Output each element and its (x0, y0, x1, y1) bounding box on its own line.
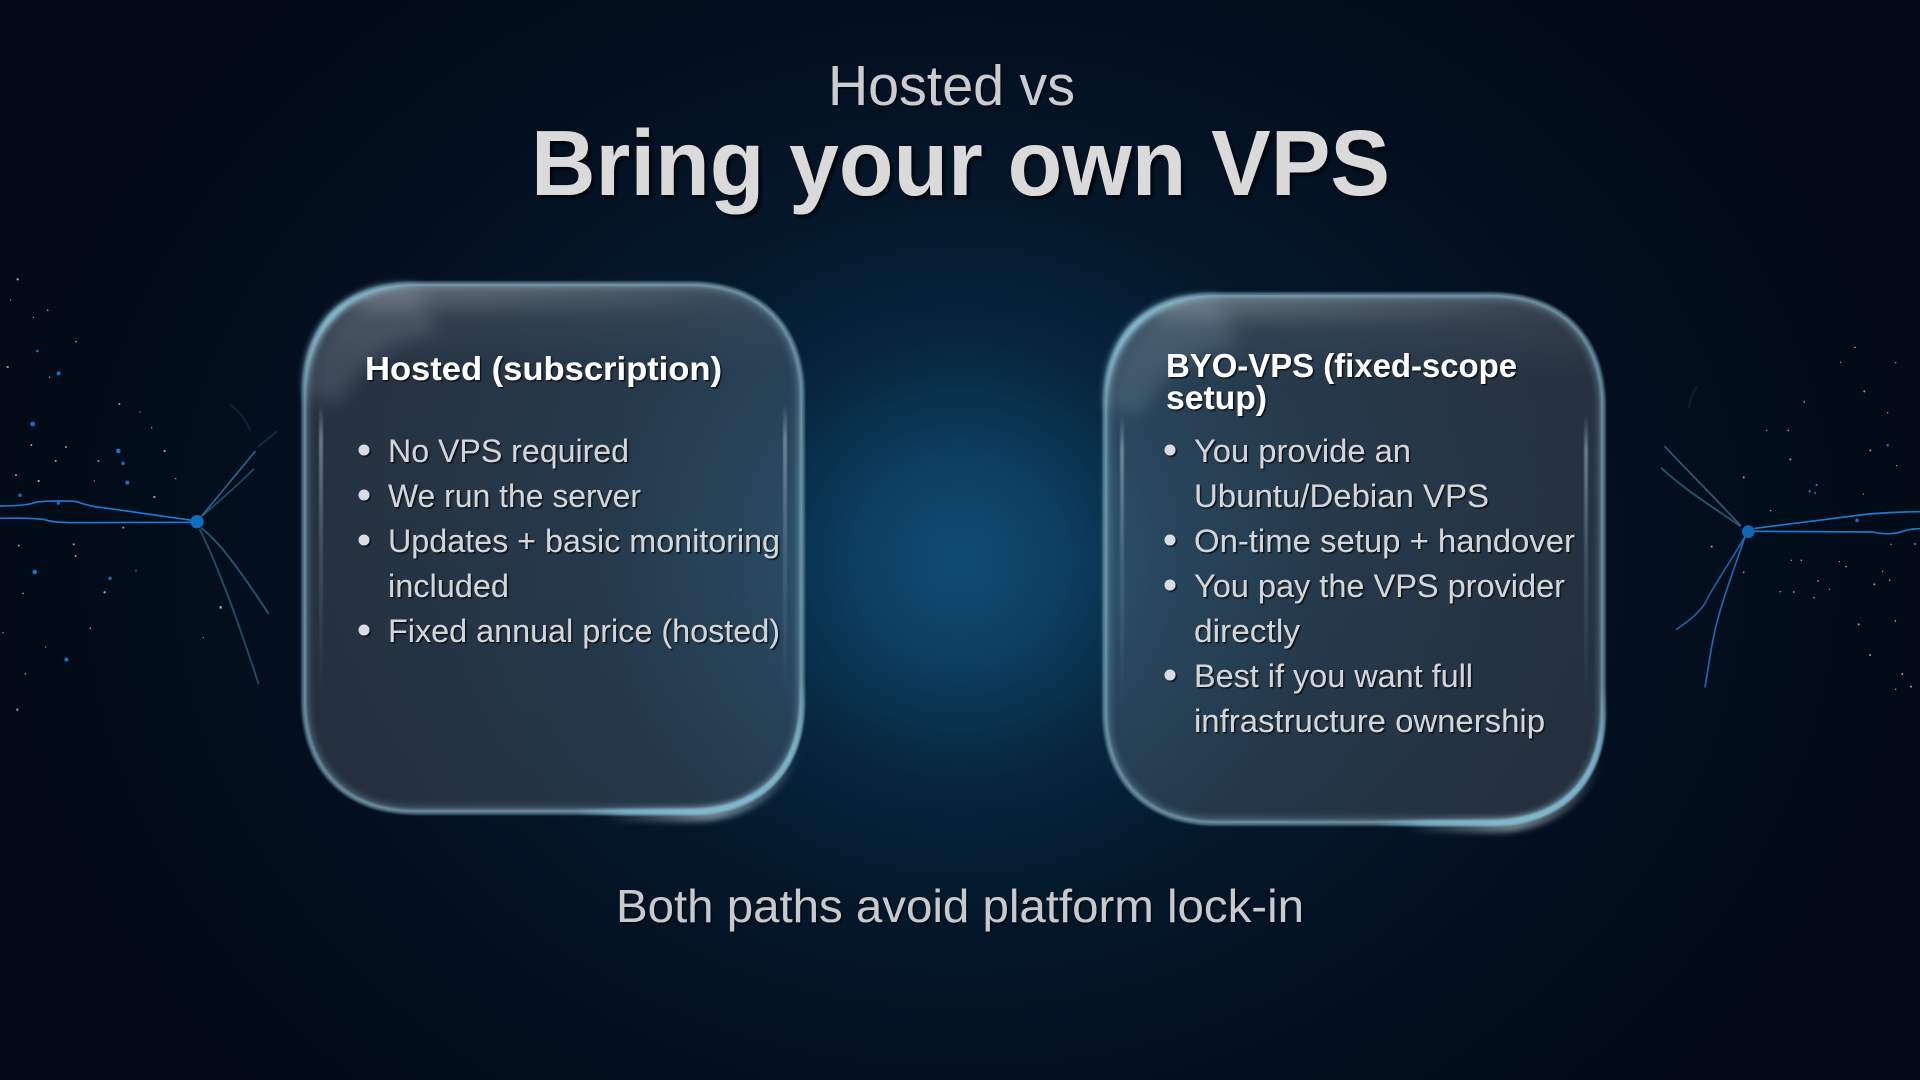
list item 4: Best if you want full (1194, 658, 1473, 694)
bullet icons (358, 444, 370, 636)
panel: hosted subscription (304, 280, 802, 815)
card heading: BYO-VPS (fixed-scope (1166, 347, 1517, 384)
left star field (2, 278, 222, 711)
list item 1: Ubuntu/Debian VPS (1194, 478, 1489, 514)
title line 2: Bring your own VPS (531, 111, 1390, 215)
list item 4: Fixed annual price (hosted) (388, 613, 780, 649)
left network lines (0, 405, 277, 683)
list item 2: On-time setup + handover (1194, 523, 1575, 559)
right network lines (1662, 387, 1920, 687)
card heading: Hosted (subscription) (365, 350, 722, 387)
bullet list (1164, 433, 1575, 739)
list item 3: included (388, 568, 509, 604)
list item 3 (388, 523, 780, 604)
heading (531, 54, 1390, 215)
card heading (1166, 347, 1517, 416)
card body (304, 280, 802, 815)
left node (190, 515, 204, 528)
list item 4 (1194, 658, 1545, 739)
list item 3: You pay the VPS provider (1194, 568, 1565, 604)
list item 1 (1194, 433, 1489, 514)
bullet list (358, 433, 780, 649)
list item 4: infrastructure ownership (1194, 703, 1545, 739)
right network graphic (1662, 346, 1920, 690)
closing statement: Both paths avoid platform lock-in (616, 880, 1304, 932)
right star field (1711, 346, 1916, 690)
card heading: setup) (1166, 379, 1267, 416)
list item 3: Updates + basic monitoring (388, 523, 780, 559)
left network graphic (0, 278, 277, 711)
bullet icons (1164, 444, 1176, 680)
title line 1: Hosted vs (828, 54, 1075, 118)
list item 1: No VPS required (388, 433, 629, 469)
right node (1742, 525, 1755, 538)
list item 3 (1194, 568, 1565, 649)
card body (1105, 291, 1603, 826)
list item 2: We run the server (388, 478, 641, 514)
panel: bring your own VPS (1105, 291, 1603, 826)
list item 1: You provide an (1194, 433, 1411, 469)
list item 3: directly (1194, 613, 1300, 649)
